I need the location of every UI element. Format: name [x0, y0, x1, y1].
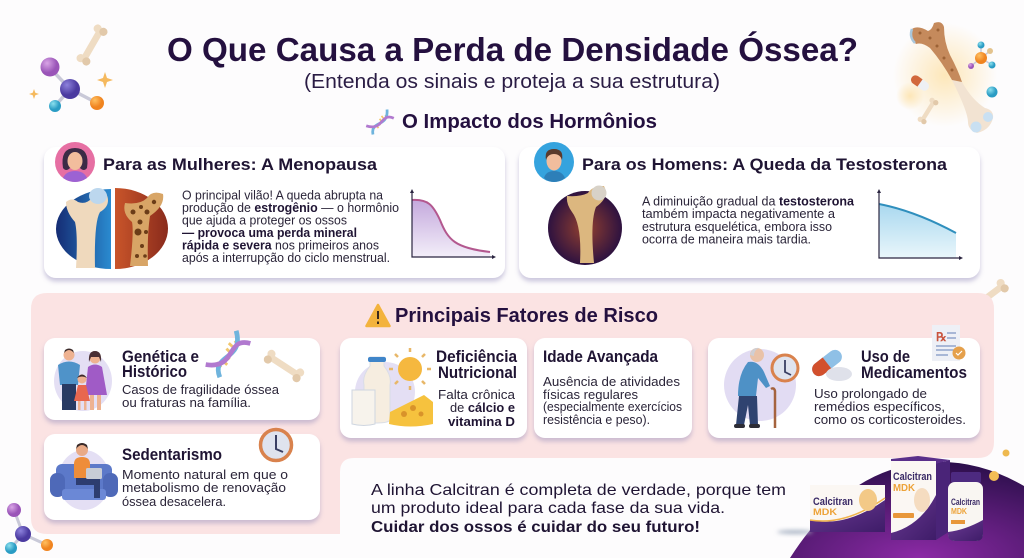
text: women body: após a interrupção do ciclo menstrual. — [182, 251, 390, 265]
section heading: hormones: O Impacto dos Hormônios — [402, 111, 657, 133]
illustration: bone in circle — [548, 186, 622, 265]
heading: women: Para as Mulheres: A Menopausa — [103, 155, 378, 174]
section heading: risk factors: Principais Fatores de Risco — [395, 305, 658, 327]
text: age: Ausência de atividades — [543, 375, 680, 389]
illustration: healthy vs porous bone — [56, 188, 168, 269]
product: bottle: Calcitran — [951, 497, 980, 508]
text: medication: Uso prolongado de — [814, 387, 927, 401]
text: women body — [182, 188, 399, 265]
decoration: purple blob — [790, 462, 1024, 558]
text: medication: como os corticosteroides. — [814, 413, 966, 427]
text: age: resistência e peso). — [543, 413, 650, 427]
product: box two — [891, 456, 950, 540]
text: age: (especialmente exercícios — [543, 400, 682, 414]
text: sedentary: Momento natural em que o — [122, 468, 288, 482]
text: men body: ocorra de maneira mais tardia. — [642, 232, 811, 246]
panel: risk factors — [31, 293, 994, 534]
icon: warning — [366, 305, 390, 326]
product: box two: MDK — [893, 483, 916, 494]
card: age — [534, 338, 692, 438]
decoration: top-left molecule and bone — [29, 23, 113, 112]
icon: dna — [206, 331, 250, 377]
text: nutrition — [436, 348, 518, 429]
text: genetics: ou fraturas na família. — [122, 396, 251, 410]
icon: woman avatar — [55, 142, 95, 182]
icon: bone — [262, 348, 306, 384]
product: box two: Calcitran — [893, 471, 932, 483]
text: nutrition: Nutricional — [438, 364, 517, 382]
icon: clock — [260, 430, 292, 460]
card: nutrition — [340, 338, 527, 438]
text: age — [543, 348, 682, 427]
icon: elderly man with cane — [724, 348, 796, 428]
text: medication: remédios específicos, — [814, 400, 945, 414]
text: nutrition: vitamina D — [448, 415, 515, 429]
icon: prescription: ℞ — [936, 330, 947, 344]
decoration: bottom-left molecule — [5, 503, 53, 554]
text: women body: que ajuda a proteger os ossos — [182, 214, 347, 228]
card: sedentary — [44, 430, 320, 520]
icon: prescription — [932, 325, 966, 361]
title: O Que Causa a Perda de Densidade Óssea? — [167, 31, 858, 68]
icon: clock — [772, 355, 798, 381]
chart: rapid decline — [410, 189, 496, 259]
text: men body: estrutura esquelética, embora isso — [642, 220, 832, 234]
text: genetics — [122, 348, 279, 410]
text: men body: também impacta negativamente a — [642, 207, 835, 221]
text: men body — [642, 194, 855, 246]
panel: women menopause — [44, 142, 505, 278]
chart: gradual decline — [877, 189, 963, 260]
icon: family — [54, 348, 112, 411]
card: medication — [708, 325, 980, 438]
text: women body: rápida e severa nos primeiros anos — [182, 238, 379, 252]
product: box one: Calcitran — [813, 496, 853, 508]
text: women body: produção de estrogênio — o hormônio — [182, 201, 399, 215]
text: nutrition: Deficiência — [436, 348, 518, 366]
icon: pills — [809, 347, 852, 381]
text: age: Idade Avançada — [543, 348, 659, 366]
icon: person on sofa — [50, 443, 118, 510]
text: nutrition: Falta crônica — [438, 388, 515, 402]
text: sedentary — [122, 446, 288, 509]
icon: dna — [366, 110, 394, 134]
decoration: top-right femur with molecule and capsule — [893, 22, 998, 133]
decoration: bone right — [968, 277, 1010, 315]
call to action text — [371, 482, 786, 536]
subtitle: (Entenda os sinais e proteja a sua estrutura) — [304, 71, 720, 93]
heading: men: Para os Homens: A Queda da Testosterona — [582, 155, 948, 174]
text: medication — [814, 348, 967, 427]
call to action text: A linha Calcitran é completa de verdade, porque tem — [371, 482, 786, 499]
text: genetics: Genética e — [122, 348, 199, 366]
text: nutrition: de cálcio e — [450, 401, 515, 415]
text: women body: — provoca uma perda mineral — [182, 226, 357, 240]
text: women body: O principal vilão! A queda abrupta na — [182, 188, 383, 202]
text: genetics: Casos de fragilidade óssea — [122, 383, 279, 397]
text: sedentary: Sedentarismo — [122, 446, 222, 464]
text: age: físicas regulares — [543, 388, 638, 402]
text: sedentary: metabolismo de renovação — [122, 481, 286, 495]
text: sedentary: óssea desacelera. — [122, 495, 226, 509]
card: genetics — [44, 331, 320, 420]
text: medication: Uso de — [861, 348, 910, 366]
icon: man avatar — [534, 142, 574, 182]
product: box one: MDK — [813, 507, 837, 518]
product: box one — [810, 485, 885, 532]
panel: men testosterone — [519, 142, 980, 278]
icon: milk, sun and cheese — [352, 348, 433, 426]
text: men body: A diminuição gradual da testosterona — [642, 194, 855, 208]
call to action text: um produto ideal para cada fase da sua vida. — [371, 500, 725, 517]
product: bottle: MDK — [951, 507, 967, 516]
text: genetics: Histórico — [122, 363, 187, 381]
product: bottle — [948, 472, 983, 541]
call to action text: Cuidar dos ossos é cuidar do seu futuro! — [371, 519, 700, 536]
text: medication: Medicamentos — [861, 364, 967, 382]
